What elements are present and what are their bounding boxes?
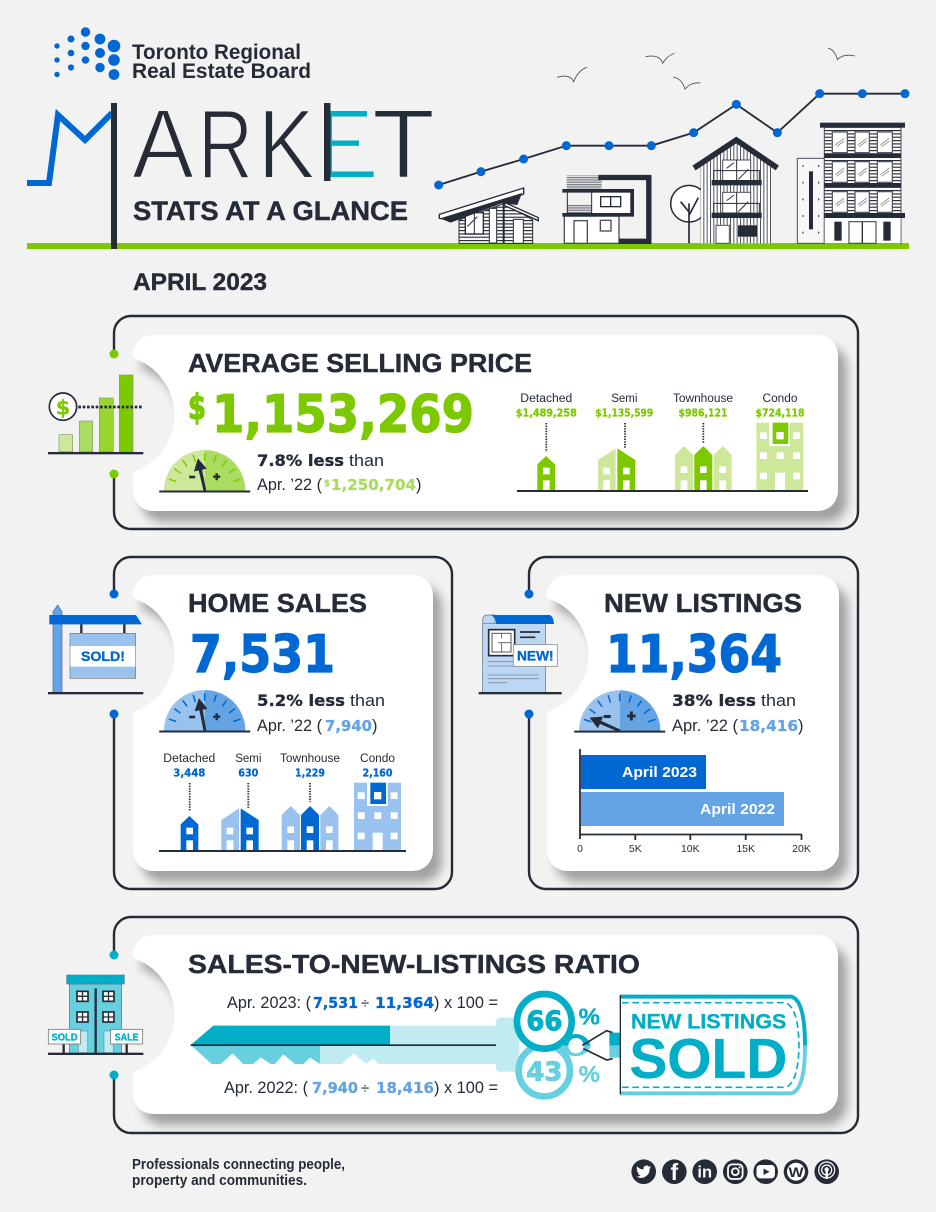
icon: sold sign (48, 605, 143, 694)
social media icons (631, 1159, 839, 1185)
43 percent ring: 43 (526, 1057, 562, 1087)
big number: 11,364 (606, 625, 782, 685)
modern cottage (439, 188, 538, 243)
icon: twitter (631, 1159, 656, 1184)
housing type breakdown: 2,160 (362, 768, 392, 780)
housing type breakdown: 3,448 (173, 768, 205, 780)
change text: 18,416 (739, 717, 798, 735)
white card (547, 575, 839, 871)
formula: April 2023 (227, 994, 498, 1012)
bar: April 2023: April 2023 (622, 764, 697, 781)
heading: SALES-TO-NEW-LISTINGS RATIO (188, 949, 640, 979)
panel outline (114, 316, 858, 529)
heading: HOME SALES (188, 588, 367, 618)
bar chart: new listings by year: 5K (629, 843, 642, 855)
gabled house with balconies (694, 140, 777, 243)
key bow (496, 1018, 519, 1072)
date: April 2023: APRIL 2023 (133, 269, 267, 296)
change text: than (761, 692, 796, 710)
icon: wordpress (784, 1159, 808, 1184)
white card (133, 335, 838, 511)
change text (257, 451, 422, 494)
card shadow (142, 346, 847, 522)
housing type breakdown: Condo (360, 753, 395, 765)
formula: April 2022: Apr. 2022: ( (224, 1079, 308, 1097)
logo: Toronto Regional Real Estate Board (54, 27, 311, 83)
icon: linkedin (692, 1159, 717, 1184)
gauge (159, 690, 250, 732)
title: MARKET: R (198, 89, 253, 199)
change text: ) (416, 476, 422, 494)
formula: April 2023: ÷ (361, 995, 369, 1012)
key bow with percentages and sold tag (496, 994, 805, 1096)
icon: linkedin: in (697, 1164, 712, 1182)
bar: April 2022 (581, 792, 784, 826)
formula: April 2022: ) x 100 = (434, 1079, 498, 1097)
formula: April 2022 (224, 1079, 498, 1097)
heading: NEW LISTINGS (604, 588, 802, 618)
change text: 7,940 (325, 717, 372, 735)
housing type breakdown: Detached (163, 753, 215, 765)
43 percent ring (519, 1045, 600, 1096)
title: MARKET: T (372, 89, 435, 199)
formula: April 2023: ) x 100 = (434, 994, 498, 1012)
bar chart: new listings by year: 15K (736, 843, 755, 855)
title: MARKET: E (317, 89, 379, 199)
housing type breakdown: 1,229 (295, 768, 325, 780)
change text: than (349, 452, 384, 470)
housing type breakdown: Detached (520, 393, 572, 405)
title post (111, 103, 117, 249)
66 percent ring: % (579, 1004, 600, 1030)
connector dots (110, 950, 118, 1080)
icon: rising bars with dollar coin: $ (56, 395, 70, 419)
icon: sold sign: SOLD! (81, 649, 125, 664)
icon: new listing document (479, 615, 562, 694)
housing type breakdown: Semi (235, 753, 261, 765)
housing type breakdown: $986,121 (678, 408, 728, 420)
housing type breakdown: Semi (611, 393, 637, 405)
housing type breakdown: Townhouse (673, 393, 733, 405)
tag neck (609, 1033, 620, 1046)
icon: condo building with sale signs: SOLD (51, 1032, 78, 1043)
title: MARKET: A (132, 89, 195, 199)
panel: sales-to-new-listings ratio (48, 917, 858, 1133)
footer tagline: Professionals connecting people, (132, 1157, 345, 1173)
change text: ) (798, 717, 804, 735)
gauge (159, 450, 250, 492)
rising line chart (434, 89, 909, 189)
housing type breakdown: $724,118 (756, 408, 804, 420)
heading: AVERAGE SELLING PRICE (188, 348, 532, 378)
big number: 7,531 (190, 625, 335, 685)
change text (672, 691, 804, 735)
bar chart: new listings by year: 10K (681, 843, 700, 855)
housing type breakdown: $1,489,258 (516, 408, 577, 420)
bar: April 2023 (581, 755, 706, 789)
change text: $ (324, 479, 330, 489)
logo: Toronto Regional Real Estate Board: Toronto Regional (132, 41, 301, 64)
modern two-storey house (562, 175, 649, 243)
bar chart: new listings by year (577, 749, 811, 855)
icon: youtube (753, 1159, 778, 1184)
66 percent ring (517, 994, 600, 1049)
bar chart: new listings by year: 0 (577, 843, 583, 855)
icon: facebook (662, 1159, 687, 1185)
housing type breakdown: Townhouse (280, 753, 340, 765)
change text: than (350, 692, 385, 710)
apartment building (797, 123, 905, 243)
title: MARKET (27, 89, 435, 199)
white card (133, 575, 433, 871)
footer tagline (132, 1157, 345, 1189)
tag body: NEW LISTINGS (631, 1009, 786, 1033)
formula: April 2022: 7,940 (312, 1079, 358, 1097)
connector dots (524, 590, 534, 718)
formula: April 2023: 7,531 (313, 994, 358, 1012)
change text: ) (372, 717, 378, 735)
housing type breakdown: 630 (238, 768, 258, 780)
66 percent ring: 66 (526, 1006, 562, 1037)
gauge (574, 690, 665, 737)
logo: Toronto Regional Real Estate Board: Real Estate Board (132, 60, 311, 83)
formula: April 2022: 18,416 (376, 1079, 434, 1097)
change text: Apr. ’22 ( (672, 717, 738, 735)
tag body: SOLD (629, 1028, 787, 1091)
panel outline (114, 917, 858, 1133)
tag body (620, 995, 805, 1094)
change text: 38% less (672, 691, 756, 710)
card shadow (142, 586, 442, 882)
key: ratio comparison bar (191, 1026, 500, 1064)
change text: Apr. ’22 ( (257, 476, 322, 494)
icon: condo building with sale signs (48, 975, 143, 1055)
tag string (582, 1031, 613, 1060)
change text: Apr. ’22 ( (257, 717, 322, 735)
white card (133, 935, 838, 1114)
icon: facebook: f (670, 1159, 678, 1185)
key ring (561, 1034, 591, 1056)
connector dots (110, 590, 118, 718)
panel outline (529, 557, 858, 889)
housing type breakdown: Condo (762, 393, 798, 405)
formula: April 2023: Apr. 2023: ( (227, 994, 311, 1012)
housing type breakdown: $1,135,599 (595, 408, 653, 420)
header illustration: skyline of homes (434, 48, 909, 243)
icon: new listing document: NEW! (517, 649, 554, 664)
change text: 7.8% less (257, 451, 344, 470)
change text: 5.2% less (257, 691, 345, 710)
big number: $ (188, 388, 206, 428)
panel: new listings (479, 557, 858, 889)
footer tagline: property and communities. (132, 1173, 307, 1189)
subtitle: stats at a glance: STATS AT A GLANCE (133, 196, 408, 226)
icon: wordpress: W (788, 1164, 804, 1180)
icon: instagram (723, 1159, 748, 1184)
icon: rising bars with dollar coin (48, 375, 143, 454)
ground line (27, 243, 909, 249)
connector dots (110, 350, 118, 478)
change text: 1,250,704 (331, 476, 416, 494)
panel: home sales (48, 557, 452, 889)
title: MARKET: K (258, 89, 315, 199)
birds (557, 48, 855, 89)
bar: April 2022: April 2022 (700, 801, 775, 818)
housing type breakdown (159, 753, 406, 852)
card shadow (556, 586, 848, 882)
panel: average selling price (48, 316, 858, 529)
formula: April 2022: ÷ (361, 1080, 369, 1097)
card shadow (142, 946, 847, 1125)
big number: 1,153,269 (212, 385, 474, 445)
icon: podcast (814, 1159, 839, 1184)
bar chart: new listings by year: 20K (792, 843, 811, 855)
tree (671, 185, 707, 243)
change text (257, 691, 385, 735)
icon: condo building with sale signs: SALE (115, 1032, 139, 1043)
formula: April 2023: 11,364 (375, 994, 434, 1012)
43 percent ring: % (579, 1061, 600, 1087)
housing type breakdown (516, 393, 808, 492)
panel outline (114, 557, 452, 889)
